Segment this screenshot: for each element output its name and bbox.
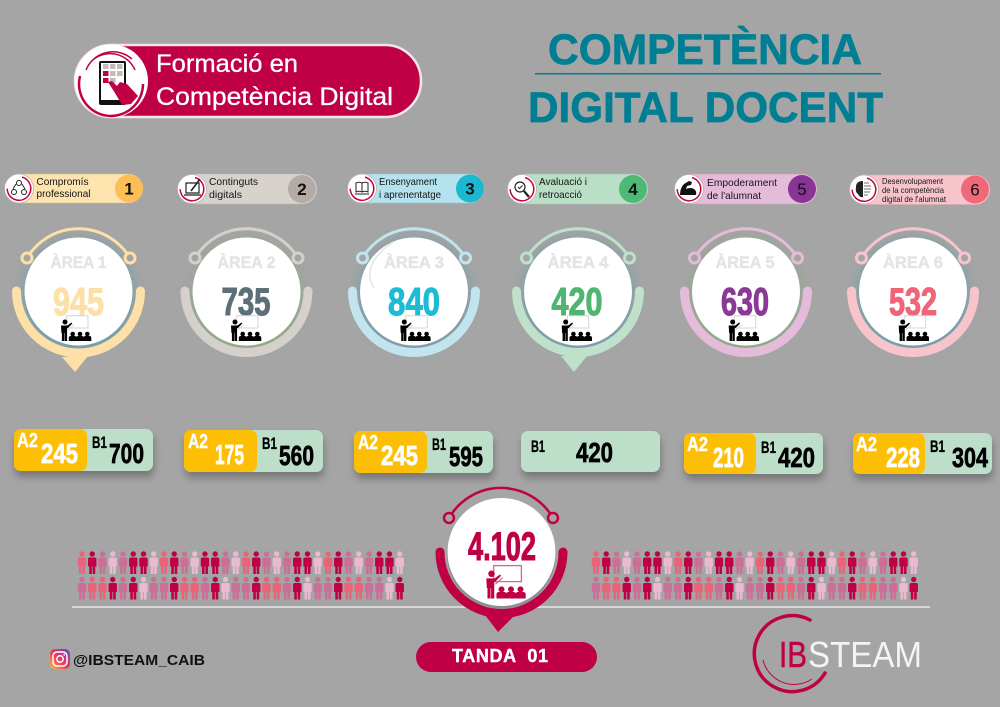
- pill: area 3: Ensenyament: [379, 176, 437, 188]
- title: DIGITAL DOCENT: [528, 84, 883, 132]
- pill: area 5: [674, 174, 817, 204]
- gauge: area 2: 735: [222, 281, 270, 324]
- pill: area 4: Avaluació i: [539, 176, 587, 188]
- gauge: area 1: ÀREA 1: [50, 253, 106, 272]
- pill: area 1: [4, 174, 143, 203]
- level bar: area 3: 595: [449, 441, 483, 472]
- total gauge: [440, 488, 563, 632]
- pill: area 1: professional: [36, 188, 90, 200]
- gauge: area 5: ÀREA 5: [716, 253, 774, 272]
- gauge: area 3: ÀREA 3: [384, 253, 444, 272]
- pill: area 2: digitals: [209, 189, 242, 201]
- pill: area 2: 2: [297, 180, 307, 199]
- pill: area 3: i aprenentatge: [379, 189, 441, 201]
- gauge: area 1: 945: [53, 281, 104, 324]
- level bar: area 2: [184, 430, 323, 472]
- pill: area 6: Desenvolupament: [882, 177, 944, 186]
- level bar: area 4: B1: [531, 437, 545, 456]
- level bar: area 1: A2: [17, 430, 38, 452]
- level bar: area 3: 245: [381, 440, 418, 471]
- level bar: area 6: 228: [886, 442, 920, 473]
- pill: area 1: Compromís: [36, 176, 88, 188]
- pill: area 2: Continguts: [209, 176, 258, 188]
- pill: area 6: [850, 175, 990, 204]
- gauge: area 3: [352, 229, 476, 352]
- icon: instagram: [50, 649, 70, 669]
- label: tanda: TANDA 01: [452, 646, 548, 666]
- level bar: area 2: B1: [262, 434, 277, 453]
- pill: area 2: [178, 174, 317, 204]
- pill: area 4: retroacció: [539, 189, 582, 201]
- logo: IBSTEAM: [754, 616, 922, 692]
- badge: Formació en Competència Digital: [75, 44, 421, 118]
- gauge: area 2: [185, 229, 308, 352]
- pill: area 4: [508, 174, 648, 204]
- pill: area 6: 6: [970, 180, 980, 200]
- level bar: area 4: [521, 431, 660, 472]
- level bar: area 1: [14, 429, 153, 471]
- gauge: area 3: 840: [388, 281, 440, 324]
- gauge: area 2: ÀREA 2: [218, 253, 276, 272]
- level bar: area 4: 420: [576, 437, 613, 468]
- level bar: area 5: B1: [761, 438, 776, 457]
- gauge: area 6: 532: [889, 281, 937, 324]
- social handle: [50, 649, 205, 669]
- level bar: area 1: 245: [41, 438, 78, 469]
- pictogram: people right: [592, 551, 918, 600]
- level bar: area 3: A2: [358, 432, 378, 454]
- pill: area 5: Empoderament: [707, 177, 777, 189]
- level bar: area 6: B1: [930, 437, 945, 456]
- level bar: area 3: [354, 431, 493, 473]
- panel: area pills: [4, 174, 990, 204]
- pill: area 1: 1: [124, 180, 134, 198]
- pill: area 5: 5: [797, 180, 807, 199]
- label: tanda: [416, 642, 597, 672]
- title: COMPETÈNCIA: [548, 26, 862, 74]
- badge text: Formació en: [156, 50, 298, 78]
- level bar: area 2: A2: [188, 431, 208, 453]
- level bar: area 3: B1: [432, 435, 446, 454]
- level bar: area 2: 560: [279, 440, 314, 471]
- logo: IBSTEAM: IB: [779, 634, 807, 675]
- pill: area 6: digital de l'alumnat: [882, 195, 947, 204]
- total gauge: 4.102: [468, 525, 536, 569]
- pill: area 5: de l'alumnat: [707, 190, 761, 202]
- level bar: area 5: 210: [713, 442, 744, 473]
- level bar: area 5: 420: [778, 442, 815, 473]
- pill: area 6: de la competència: [882, 186, 944, 195]
- badge text: [156, 50, 393, 111]
- gauge: area 5: 630: [721, 281, 769, 324]
- level bar: area 5: [684, 433, 823, 474]
- level bar: area 1: B1: [92, 433, 107, 452]
- pill: area 3: 3: [465, 180, 475, 198]
- gauge: area 4: [516, 229, 640, 372]
- pictogram: people left: [78, 551, 404, 600]
- badge text: Competència Digital: [156, 83, 393, 111]
- gauge: area 4: ÀREA 4: [548, 253, 609, 272]
- icon: tablet: [99, 61, 138, 105]
- gauge: area 5: [684, 229, 808, 352]
- gauge: area 1: [16, 229, 140, 372]
- social handle: @IBSTEAM_CAIB: [73, 653, 205, 669]
- title: [528, 26, 883, 132]
- gauge: area 4: 420: [552, 281, 602, 324]
- level bar: area 2: 175: [215, 439, 244, 470]
- level bar: area 6: 304: [952, 442, 988, 473]
- logo: IBSTEAM: STEAM: [808, 634, 922, 675]
- pill: area 3: [348, 174, 484, 203]
- level bar: area 6: [853, 433, 992, 474]
- pill: area 4: 4: [628, 180, 638, 199]
- gauge: area 6: ÀREA 6: [883, 253, 943, 272]
- gauge: area 6: [852, 229, 974, 352]
- level bar: area 5: A2: [687, 434, 708, 456]
- level bar: area 6: A2: [856, 434, 877, 456]
- level bar: area 1: 700: [109, 438, 144, 469]
